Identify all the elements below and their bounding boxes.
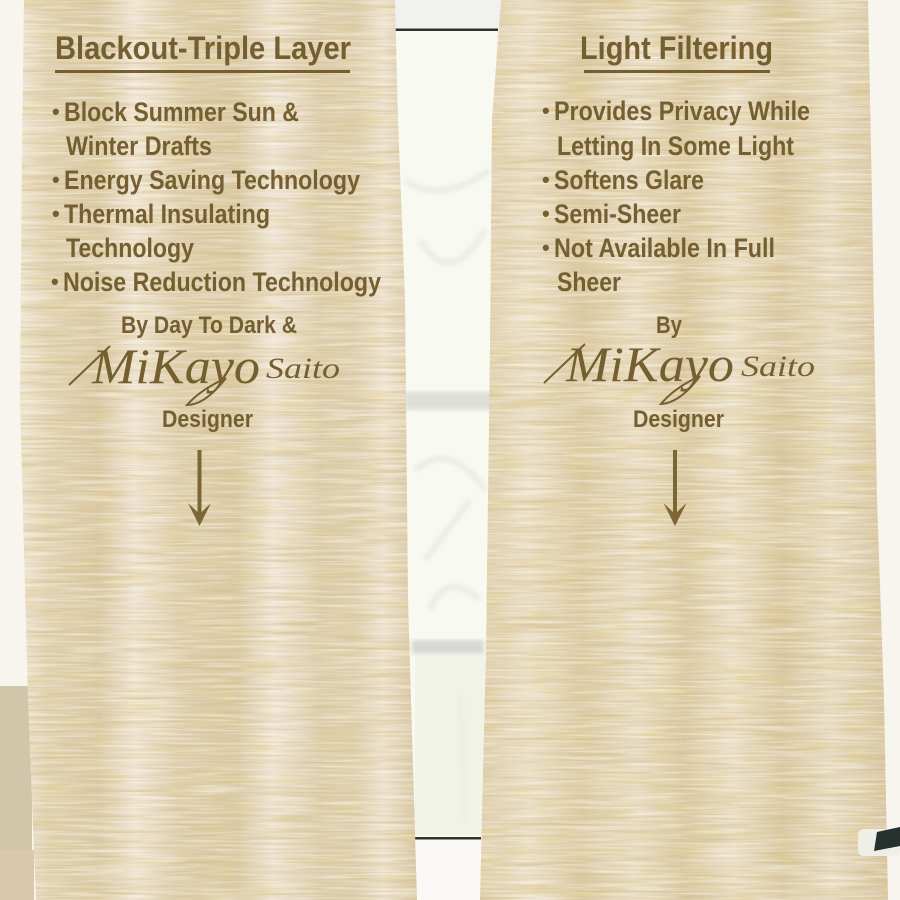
- window: [394, 0, 500, 900]
- credit line: designer: Designer: [162, 406, 253, 433]
- signature: left: Saito: [266, 352, 340, 385]
- feature list: light filtering: [542, 96, 810, 297]
- feature list: blackout: Block Summer Sun &: [64, 97, 299, 127]
- feature list: light filtering: •: [542, 98, 550, 123]
- feature list: blackout: Winter Drafts: [66, 131, 212, 161]
- credit line: designer: Designer: [633, 406, 724, 433]
- heading: blackout: Blackout-Triple Layer: [55, 30, 351, 66]
- signature: left: MiKayo: [91, 338, 260, 394]
- feature list: blackout: •: [52, 99, 60, 124]
- feature list: light filtering: Letting In Some Light: [557, 131, 794, 161]
- object at lower right: [858, 827, 900, 856]
- feature list: light filtering: •: [542, 235, 550, 260]
- feature list: blackout: [51, 97, 381, 297]
- credit line: by: By: [656, 312, 683, 339]
- feature list: light filtering: •: [542, 167, 550, 192]
- feature list: light filtering: Semi-Sheer: [554, 199, 681, 229]
- arrow: left: [188, 450, 211, 526]
- feature list: blackout: Energy Saving Technology: [64, 165, 360, 195]
- feature list: light filtering: Provides Privacy While: [554, 96, 810, 126]
- feature list: light filtering: Softens Glare: [554, 165, 704, 195]
- signature: left: [69, 338, 340, 405]
- panel: blackout text: [51, 30, 381, 526]
- feature list: blackout: •: [51, 269, 59, 294]
- heading: light filtering: Light Filtering: [580, 30, 773, 66]
- credit line: by day to dark: By Day To Dark &: [121, 312, 297, 339]
- feature list: blackout: Thermal Insulating: [64, 199, 270, 229]
- feature list: blackout: •: [52, 167, 60, 192]
- right curtain: [470, 0, 900, 900]
- feature list: blackout: •: [52, 201, 60, 226]
- feature list: light filtering: •: [542, 201, 550, 226]
- feature list: light filtering: Not Available In Full: [554, 233, 775, 263]
- arrow: right: [664, 450, 686, 526]
- signature: right: [544, 336, 815, 404]
- signature: right: MiKayo: [565, 336, 734, 392]
- panel: light filtering text: [542, 30, 815, 526]
- left curtain: [0, 0, 430, 900]
- feature list: light filtering: Sheer: [557, 267, 621, 297]
- chair at lower left: [0, 686, 34, 900]
- feature list: blackout: Noise Reduction Technology: [63, 267, 381, 297]
- feature list: blackout: Technology: [66, 233, 194, 263]
- signature: right: Saito: [741, 350, 815, 383]
